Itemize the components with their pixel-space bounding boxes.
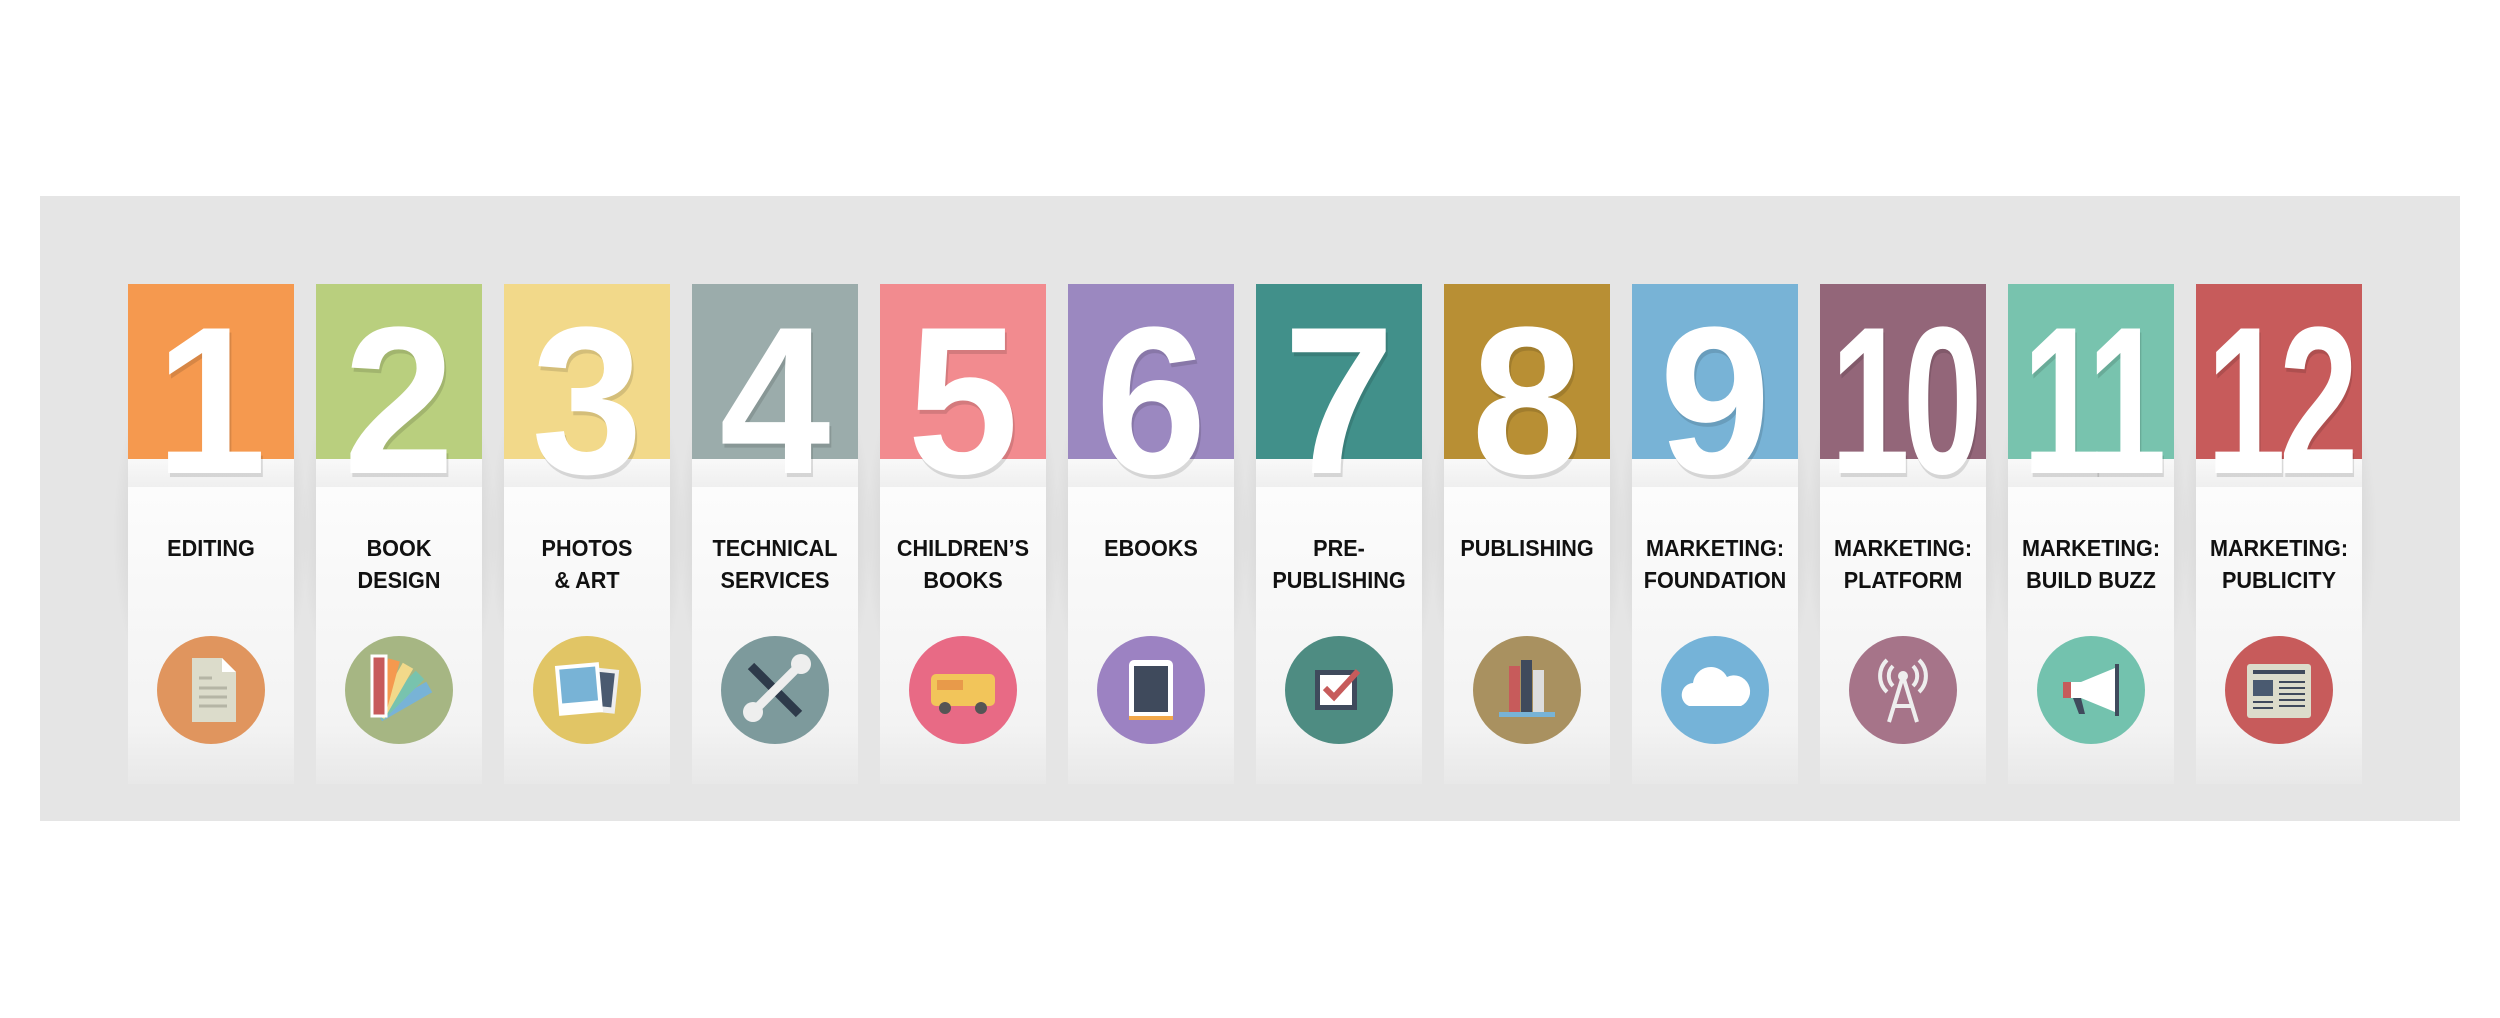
label: TECHNICAL (713, 535, 837, 561)
card 11: marketing build buzz (2006, 283, 2176, 756)
label (1644, 535, 1786, 593)
icon: swatches (345, 636, 453, 744)
label: PRE- (1313, 535, 1365, 561)
label: DESIGN (358, 567, 440, 593)
number 11: 11 (2022, 283, 2160, 518)
card 4: technical services (690, 283, 860, 756)
label: BUILD BUZZ (2026, 567, 2156, 593)
card 3: photos & art (502, 283, 672, 756)
icon: megaphone (2037, 636, 2145, 744)
number 3: 3 (532, 283, 642, 518)
number 2: 2 (344, 283, 454, 518)
label (1834, 535, 1972, 593)
label: MARKETING: (1834, 535, 1972, 561)
icon: bus (909, 636, 1017, 744)
card 10: marketing platform (1818, 283, 1988, 756)
number 12: 12 (2206, 283, 2352, 518)
label: & ART (554, 567, 620, 593)
label: FOUNDATION (1644, 567, 1786, 593)
label: PLATFORM (1844, 567, 1962, 593)
icon: tools (721, 636, 829, 744)
card 12: marketing publicity (2194, 283, 2364, 756)
label: EDITING (167, 535, 255, 561)
icon: tablet (1097, 636, 1205, 744)
label (542, 535, 632, 593)
card 5: children's books (878, 283, 1048, 756)
number 1: 1 (156, 283, 266, 518)
number 10: 10 (1830, 283, 1976, 518)
number 7: 7 (1284, 283, 1394, 518)
card 8: publishing (1442, 283, 1612, 756)
label: SERVICES (721, 567, 829, 593)
icon: checkbox (1285, 636, 1393, 744)
number 5: 5 (908, 283, 1018, 518)
icon: antenna (1849, 636, 1957, 744)
label: MARKETING: (2210, 535, 2348, 561)
icon: photos (533, 636, 641, 744)
label: CHILDREN’S (897, 535, 1029, 561)
number 8: 8 (1472, 283, 1582, 518)
card 9: marketing foundation (1630, 283, 1800, 756)
label: BOOK (367, 535, 431, 561)
card 2: book design (314, 283, 484, 756)
icon: document (157, 636, 265, 744)
card 1: editing (126, 283, 296, 756)
icon: cloud (1661, 636, 1769, 744)
label: PUBLISHING (1460, 535, 1594, 561)
card 7: pre-publishing (1254, 283, 1424, 756)
card 6: ebooks (1066, 283, 1236, 756)
background panel (40, 196, 2460, 821)
number 6: 6 (1096, 283, 1206, 518)
number 4: 4 (720, 283, 830, 518)
label: EBOOKS (1104, 535, 1198, 561)
label (2210, 535, 2348, 593)
label (2022, 535, 2160, 593)
label (358, 535, 440, 593)
label (1272, 535, 1406, 593)
label (897, 535, 1029, 593)
label: MARKETING: (2022, 535, 2160, 561)
label: PUBLISHING (1272, 567, 1406, 593)
label: BOOKS (923, 567, 1003, 593)
icon: books (1473, 636, 1581, 744)
label (712, 535, 837, 593)
icon: newspaper (2225, 636, 2333, 744)
number 9: 9 (1660, 283, 1770, 518)
label: PUBLICITY (2222, 567, 2336, 593)
label: PHOTOS (542, 535, 632, 561)
label: MARKETING: (1646, 535, 1784, 561)
